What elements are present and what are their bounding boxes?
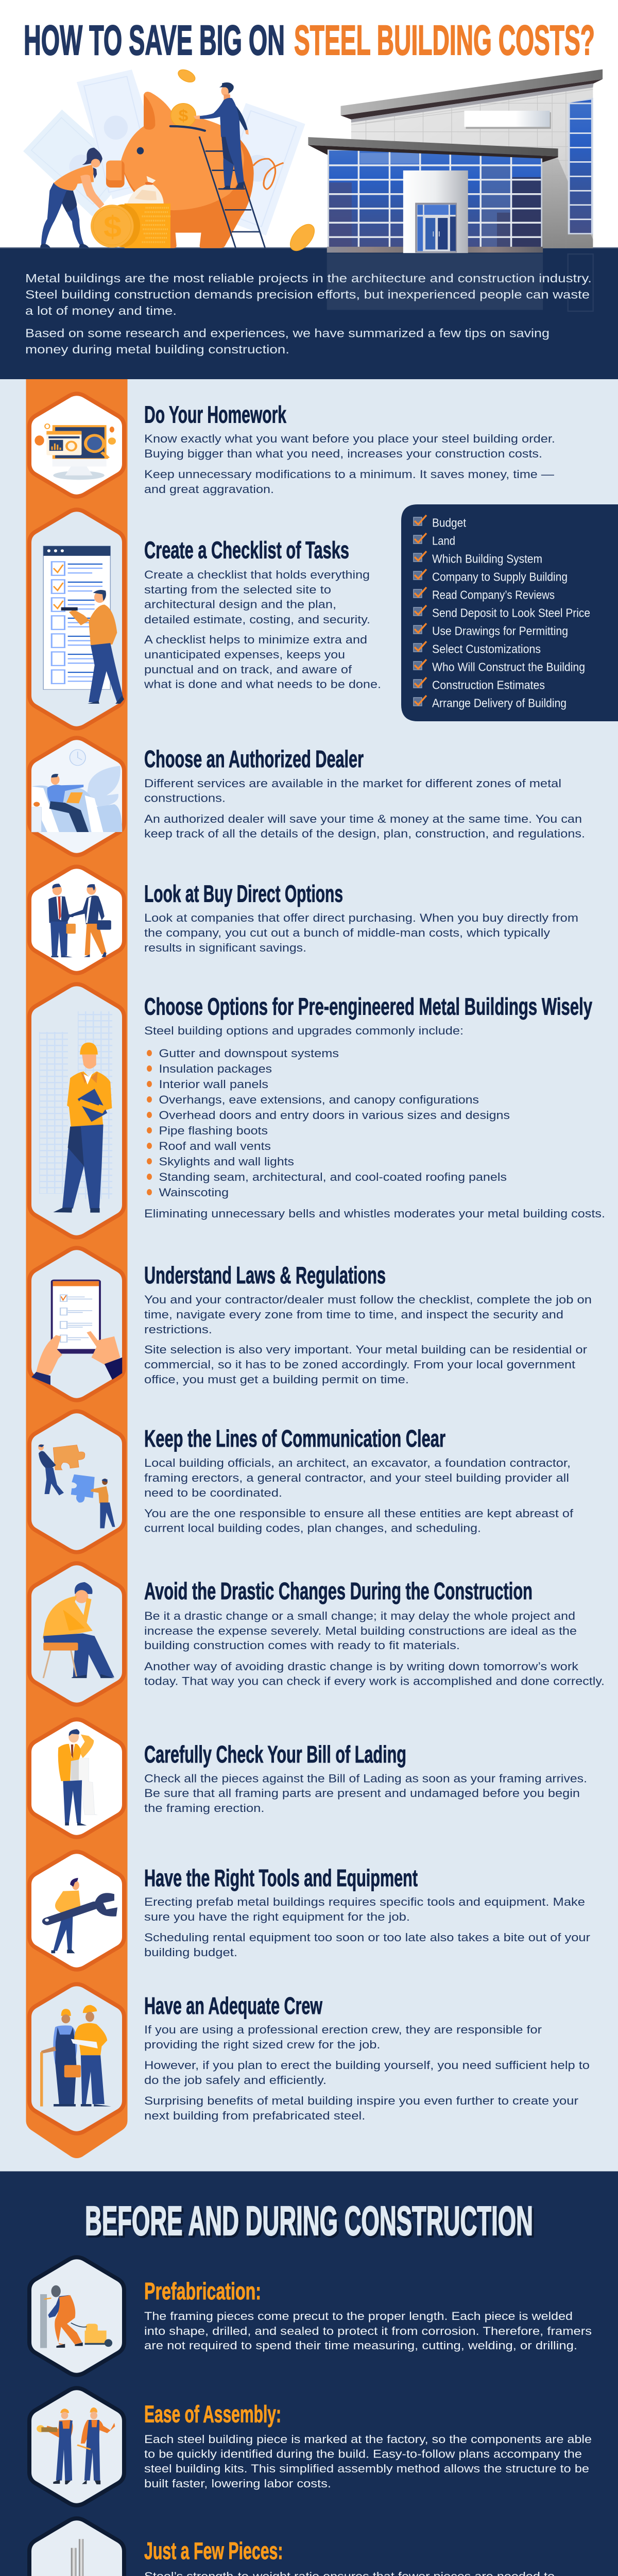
tip: options list: Standing seam, architectural, and cool-coated roofing panels (159, 1171, 507, 1183)
tip: tools and equipment (144, 1865, 590, 1959)
tip: authorized dealer: Choose an Authorized Dealer (144, 745, 364, 772)
tip: options list: Insulation packages (159, 1062, 272, 1075)
orange strip of tips (26, 379, 128, 2158)
intro text: money during metal building construction. (25, 343, 289, 356)
tip: adequate crew: Have an Adequate Crew (144, 1992, 322, 2019)
tip: adequate crew: Surprising benefits of metal building inspire you even further to create your (144, 2094, 578, 2107)
tip: options list: Gutter and downspout systems (159, 1047, 339, 1060)
tip: ease of assembly: built faster, lowering labor costs. (144, 2477, 331, 2490)
tip: buy direct (144, 880, 578, 954)
hero illustration: piggy bank with people: $ (104, 210, 122, 244)
tip: tools and equipment: Scheduling rental equipment too soon or too late also takes a bite out of your (144, 1931, 590, 1944)
tip: ease of assembly: to be quickly identified during the build. Easy-to-follow plans accompany the (144, 2447, 582, 2461)
tip: create a checklist: Create a checklist that holds everything (144, 568, 370, 581)
checklist panel: Which Building System (432, 552, 542, 566)
icon: people holding puzzle pieces (38, 1444, 115, 1528)
icon: two assembly workers (37, 2408, 115, 2484)
tip: create a checklist: detailed estimate, costing, and security. (144, 613, 370, 626)
tip: laws and regulations: Site selection is also very important. Your metal building can be residential or (144, 1343, 587, 1356)
tip: create a checklist: Create a Checklist of Tasks (144, 537, 349, 564)
tip: ease of assembly: steel building kits. This simplified assembly method allows the structure to be (144, 2462, 589, 2475)
tip: buy direct: Look at Buy Direct Options (144, 880, 343, 907)
intro text: Metal buildings are the most reliable projects in the architecture and construction industry. (25, 272, 592, 285)
tip: bill of lading: Carefully Check Your Bill of Lading (144, 1741, 406, 1768)
tip: buy direct: the company, you cut out a bunch of middle-man costs, which typically (144, 926, 550, 939)
tip: do your homework: Do Your Homework (144, 401, 286, 428)
tip: create a checklist: what is done and what needs to be done. (144, 678, 381, 690)
icon: worker with clipboard on grid (39, 1011, 112, 1213)
tip: communication: Local building officials, an architect, an excavator, a foundation contractor, (144, 1456, 571, 1469)
tip: communication (144, 1425, 574, 1534)
tip: do your homework: and great aggravation. (144, 483, 274, 496)
tip: laws and regulations: restrictions. (144, 1323, 212, 1336)
tip: adequate crew: next building from prefabricated steel. (144, 2109, 365, 2122)
icon: computer with magnifier (35, 424, 116, 480)
icon: welder (40, 2285, 112, 2348)
hero illustration: steel building (308, 70, 603, 311)
tip: adequate crew: If you are using a professional erection crew, they are responsible for (144, 2023, 542, 2036)
tip: options list: Interior wall panels (159, 1078, 268, 1091)
tip: drastic changes: increase the expense severely. Metal building constructions are ideal as the (144, 1624, 577, 1637)
icon: steel pieces (40, 2539, 114, 2576)
tip: laws and regulations: You and your contractor/dealer must follow the checklist, complete the job on (144, 1293, 592, 1306)
checklist panel: Read Company’s Reviews (432, 588, 555, 602)
tip: bill of lading: Check all the pieces against the Bill of Lading as soon as your framing arrives. (144, 1772, 587, 1785)
checklist panel: Land (432, 534, 455, 548)
tip: laws and regulations: time, navigate every zone from time to time, and inspect the security and (144, 1308, 563, 1321)
tip: ease of assembly: Ease of Assembly: (144, 2401, 281, 2428)
tip: communication: need to be coordinated. (144, 1486, 282, 1499)
tip: tools and equipment: building budget. (144, 1946, 237, 1959)
tip: buy direct: results in significant savings. (144, 941, 306, 954)
checklist panel: Company to Supply Building (432, 570, 568, 584)
tip: just a few pieces (144, 2537, 580, 2576)
tip: create a checklist: A checklist helps to minimize extra and (144, 633, 367, 646)
checklist panel: Select Customizations (432, 642, 541, 656)
tip: create a checklist: architectural design and the plan, (144, 598, 336, 611)
tip: communication: current local building codes, plan changes, and scheduling. (144, 1522, 481, 1534)
checklist panel: Arrange Delivery of Building (432, 697, 566, 710)
checklist panel: Send Deposit to Look Steel Price (432, 606, 590, 620)
tip: prefabrication: Prefabrication: (144, 2278, 261, 2304)
tip: options list: Steel building options and upgrades commonly include: (144, 1024, 464, 1037)
tip: options list (144, 993, 605, 1220)
checklist panel (401, 504, 618, 721)
tip: adequate crew: do the job safely and efficiently. (144, 2074, 327, 2087)
tip: ease of assembly: Each steel building piece is marked at the factory, so the components are able (144, 2433, 592, 2446)
tip: prefabrication: into shape, drilled, and sealed to protect it from corrosion. Therefore, framers (144, 2325, 592, 2337)
tip: communication: framing erectors, a general contractor, and your steel building provider all (144, 1471, 569, 1484)
tip: prefabrication (144, 2278, 592, 2352)
intro text: Based on some research and experiences, we have summarized a few tips on saving (25, 327, 550, 340)
tip: do your homework: Buying bigger than what you need, increases your construction costs. (144, 447, 542, 460)
icon: person thinking on stool (43, 1582, 114, 1678)
tip: authorized dealer: Different services are available in the market for different zones of metal (144, 777, 561, 790)
tip: authorized dealer: constructions. (144, 791, 226, 805)
hero illustration: piggy bank with people (23, 67, 305, 248)
intro text: a lot of money and time. (25, 304, 177, 317)
tip: drastic changes (144, 1578, 605, 1688)
tip: options list: Wainscoting (159, 1186, 229, 1199)
tip: adequate crew (144, 1992, 590, 2122)
tip: tools and equipment: Erecting prefab metal buildings requires specific tools and equipment. Make (144, 1895, 585, 1908)
icon: man with long bill (58, 1729, 97, 1825)
tip: buy direct: Look at companies that offer direct purchasing. When you buy directly from (144, 911, 578, 924)
tip: drastic changes: Another way of avoiding drastic change is by writing down tomorrow’s work (144, 1660, 579, 1673)
tip: authorized dealer (144, 745, 585, 840)
tip: authorized dealer: keep track of all the details of the design, plan, construction, and regulations. (144, 827, 585, 840)
tip: options list: Overhangs, eave extensions, and canopy configurations (159, 1093, 479, 1106)
tip: drastic changes: building construction comes with ready to fit materials. (144, 1639, 460, 1652)
tip: options list: Overhead doors and entry doors in various sizes and designs (159, 1109, 510, 1122)
tip: bill of lading (144, 1741, 587, 1815)
tip: create a checklist: starting from the selected site to (144, 583, 331, 596)
icon: checklist with man (43, 546, 124, 704)
tip: bill of lading: Be sure that all framing parts are present and undamaged before you begin (144, 1787, 580, 1800)
tip: adequate crew: providing the right sized crew for the job. (144, 2038, 380, 2051)
tip: laws and regulations: commercial, so it has to be zoned accordingly. From your local government (144, 1358, 575, 1371)
tip: communication: You are the one responsible to ensure all these entities are kept abreast of (144, 1507, 574, 1520)
intro text (25, 272, 592, 356)
panel: before and during construction (0, 2171, 618, 2576)
tip: laws and regulations: Understand Laws & Regulations (144, 1262, 386, 1289)
tip: tools and equipment: sure you have the right equipment for the job. (144, 1910, 410, 1923)
tip: drastic changes: today. That way you can check if every work is accomplished and done correctly. (144, 1675, 605, 1688)
tip: do your homework: Know exactly what you want before you place your steel building order. (144, 432, 555, 445)
tip: create a checklist: punctual and on track, and aware of (144, 663, 352, 676)
hexagon frames for the tips (29, 394, 124, 2133)
tip: prefabrication: The framing pieces come precut to the proper length. Each piece is welded (144, 2310, 573, 2323)
tip: do your homework (144, 401, 555, 496)
tip: authorized dealer: An authorized dealer will save your time & money at the same time. You can (144, 812, 582, 825)
intro text: Steel building construction demands precision efforts, but inexperienced people can waste (25, 287, 590, 301)
tip: drastic changes: Be it a drastic change or a small change; it may delay the whole project and (144, 1609, 575, 1622)
tip: just a few pieces: Just a Few Pieces: (144, 2537, 283, 2564)
tip: prefabrication: are not required to spend their time measuring, cutting, welding, or drilling. (144, 2339, 577, 2352)
coin on the ground (286, 220, 319, 255)
tip: communication: Keep the Lines of Communication Clear (144, 1425, 445, 1452)
tip: do your homework: Keep unnecessary modifications to a minimum. It saves money, time — (144, 468, 554, 481)
tip: laws and regulations (144, 1262, 592, 1386)
icon: businessmen shaking hands (48, 884, 111, 957)
checklist panel: Budget (432, 516, 467, 530)
checklist panel: Use Drawings for Permitting (432, 624, 568, 638)
tip: options list: Skylights and wall lights (159, 1155, 294, 1168)
tip: tools and equipment: Have the Right Tools and Equipment (144, 1865, 418, 1891)
checklist panel: Construction Estimates (432, 679, 545, 692)
tip: laws and regulations: office, you must get a building permit on time. (144, 1373, 409, 1386)
tip: create a checklist (144, 537, 381, 690)
icon: two workers (40, 2005, 111, 2107)
hexagon frames (29, 2257, 124, 2576)
tip: ease of assembly (144, 2401, 592, 2490)
hero illustration: piggy bank with people: $ (179, 106, 188, 125)
tip: create a checklist: unanticipated expenses, keeps you (144, 648, 345, 661)
tip: adequate crew: However, if you plan to erect the building yourself, you need sufficient help to (144, 2059, 590, 2072)
tip: bill of lading: the framing erection. (144, 1802, 265, 1815)
icon: hands holding tablet (31, 1280, 122, 1385)
tip: options list: Eliminating unnecessary bells and whistles moderates your metal building costs. (144, 1207, 605, 1220)
icon: dealer on sofa (31, 750, 122, 832)
tip: options list: Pipe flashing boots (159, 1124, 268, 1137)
icon: man with wrench (45, 1878, 117, 1953)
header band (0, 0, 618, 379)
tip: options list: Roof and wall vents (159, 1140, 271, 1153)
title: HOW TO SAVE BIG ON (24, 17, 285, 64)
checklist panel: Who Will Construct the Building (432, 660, 585, 674)
